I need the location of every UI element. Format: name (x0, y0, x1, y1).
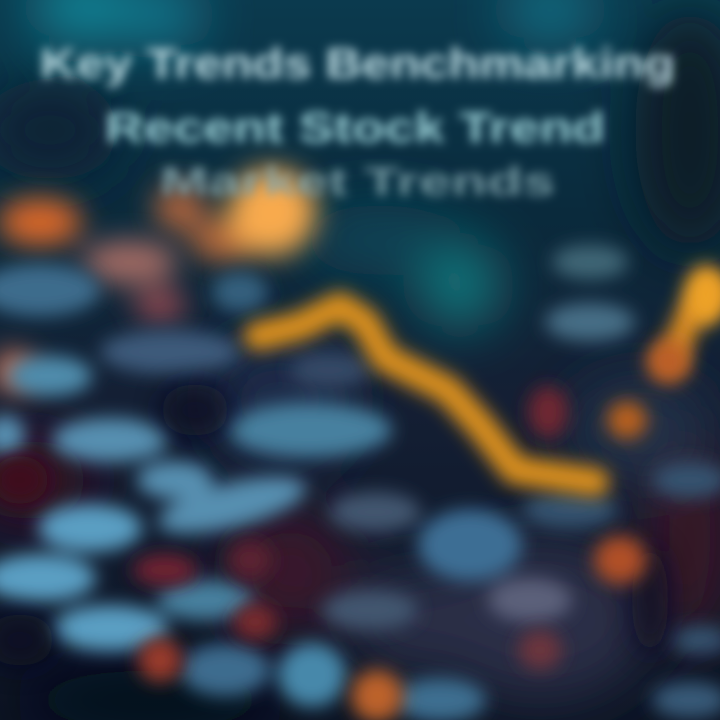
dark red blocks (0, 386, 568, 682)
title line 3: Market Trends (160, 160, 555, 204)
dark gaps between blocks (0, 384, 668, 666)
orange accent dots (351, 265, 720, 720)
blue data blocks (0, 245, 720, 720)
orange glow: sun (154, 168, 316, 262)
title (40, 40, 675, 204)
upper left orange and pink blobs (0, 198, 186, 391)
title line 2: Recent Stock Trend (105, 104, 605, 152)
line chart: orange trend line (258, 292, 712, 482)
trend line right segment (672, 292, 712, 358)
title line 1: Key Trends Benchmarking (40, 40, 675, 88)
trend line main segment (258, 306, 595, 482)
